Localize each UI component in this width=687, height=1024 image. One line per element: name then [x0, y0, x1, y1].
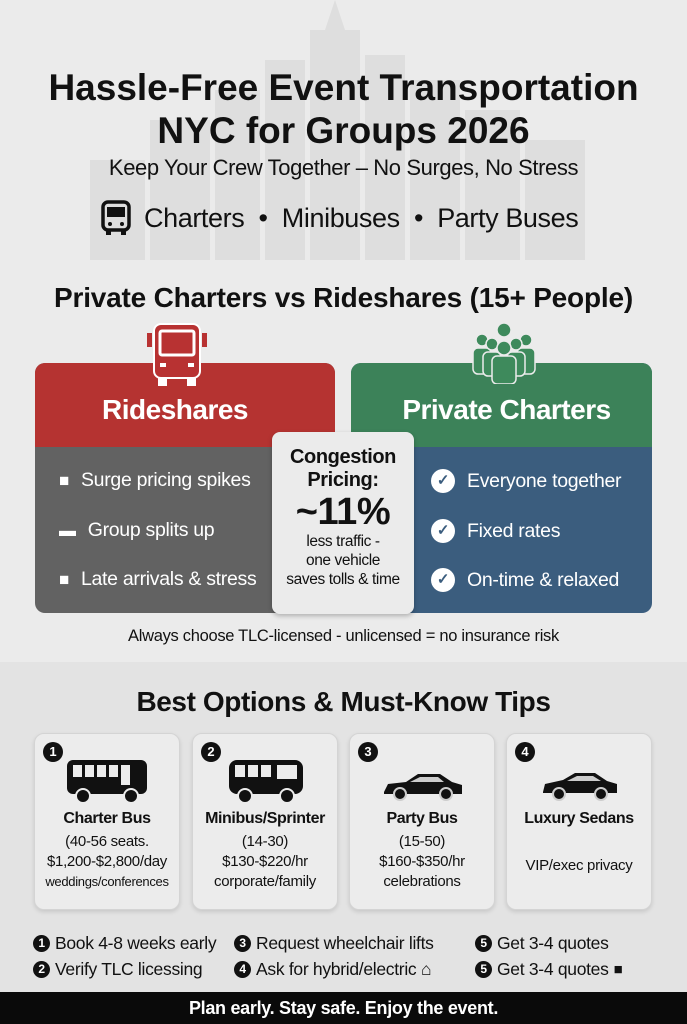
card: party bus: (15-50) — [399, 833, 445, 850]
rideshares header — [35, 363, 335, 447]
card: charter bus: (40-56 seats. — [65, 833, 149, 850]
panel: rideshares: Late arrivals & stress — [81, 568, 256, 590]
title: Hassle-Free Event Transportation — [48, 67, 639, 108]
card: party bus: $160-$350/hr — [379, 853, 465, 870]
tips list: Ask for hybrid/electric ⌂ — [256, 959, 431, 979]
charters list: ✓ — [437, 472, 449, 489]
tips list: 5 — [480, 936, 487, 950]
rideshares list: Surge pricing spikes — [81, 469, 251, 491]
callout: congestion pricing: Pricing: — [307, 469, 379, 491]
card: charter bus: $1,200-$2,800/day — [47, 853, 167, 870]
card: party bus: Party Bus — [386, 810, 458, 827]
panel: rideshares: ■ — [59, 570, 69, 588]
tips list: Book 4-8 weeks early — [55, 933, 216, 953]
callout: congestion pricing — [272, 432, 414, 614]
title — [48, 67, 639, 151]
card: charter bus — [34, 733, 180, 910]
card: minibus — [192, 733, 338, 910]
rideshares list: ■ — [59, 470, 69, 490]
tips list: Get 3-4 quotes — [497, 959, 609, 979]
card: luxury sedans: VIP/exec privacy — [526, 857, 632, 874]
card: luxury sedans — [506, 733, 652, 910]
panel: private charters: On-time & relaxed — [467, 568, 619, 590]
card: party bus: 3 — [364, 744, 372, 759]
rideshares header: Rideshares — [102, 394, 248, 425]
card: charter bus: 1 — [49, 744, 57, 759]
footer bar: Plan early. Stay safe. Enjoy the event. — [189, 998, 498, 1018]
title: NYC for Groups 2026 — [157, 110, 530, 151]
icon: green people — [472, 324, 536, 384]
tips list: 2 — [38, 962, 45, 976]
tips list: Verify TLC licessing — [55, 959, 202, 979]
tips list: 3 — [239, 936, 246, 950]
panel: rideshares: Group splits up — [88, 519, 214, 541]
icon: bus — [101, 200, 131, 235]
panel: private charters: Fixed rates — [467, 520, 560, 542]
callout: congestion pricing: one vehicle — [306, 552, 380, 569]
callout: congestion pricing: Congestion — [290, 446, 396, 468]
card: party bus: celebrations — [383, 873, 461, 890]
tips list: 1 — [38, 936, 45, 950]
card: minibus: (14-30) — [242, 833, 288, 850]
card: luxury sedans: Luxury Sedans — [524, 810, 634, 827]
card: luxury sedans: 4 — [521, 744, 529, 759]
card: party bus — [349, 733, 495, 910]
card: minibus: Minibus/Sprinter — [205, 810, 325, 827]
callout: congestion pricing: less traffic - — [306, 533, 380, 550]
section heading: options: Best Options & Must-Know Tips — [136, 686, 551, 717]
panel: private charters — [351, 363, 652, 613]
panel: rideshares: ▬ — [59, 520, 76, 540]
tips list: Request wheelchair lifts — [256, 933, 434, 953]
note: TLC licensing: Always choose TLC-licensed - unlicensed = no insurance risk — [128, 627, 559, 645]
tips list: 4 — [239, 962, 246, 976]
vehicle types line: Charters • Minibuses • Party Buses — [144, 202, 578, 232]
callout: congestion pricing: saves tolls & time — [286, 571, 400, 588]
icon: red bus — [147, 323, 207, 386]
subtitle: Keep Your Crew Together – No Surges, No Stress — [109, 155, 578, 180]
callout: congestion pricing: ~11% — [296, 491, 390, 533]
footer bar — [0, 992, 687, 1024]
card: minibus: $130-$220/hr — [222, 853, 308, 870]
tips list: ■ — [614, 961, 622, 978]
tips list: Get 3-4 quotes — [497, 933, 609, 953]
charters list: Everyone together — [467, 470, 621, 492]
panel: private charters: ✓ — [437, 522, 449, 539]
card: minibus: 2 — [207, 744, 215, 759]
panel: private charters: ✓ — [437, 571, 449, 588]
panel: rideshares — [35, 363, 335, 613]
card: minibus: corporate/family — [214, 873, 316, 890]
card: charter bus: weddings/conferences — [45, 874, 169, 889]
lower section background — [0, 662, 687, 992]
section heading: comparison: Private Charters vs Rideshares (15+ People) — [54, 282, 633, 313]
skyline background — [90, 1, 585, 260]
charters header — [351, 363, 652, 447]
tips list: 5 — [480, 962, 487, 976]
tips list — [33, 933, 622, 979]
card: charter bus: Charter Bus — [63, 810, 151, 827]
charters header: Private Charters — [402, 394, 611, 425]
